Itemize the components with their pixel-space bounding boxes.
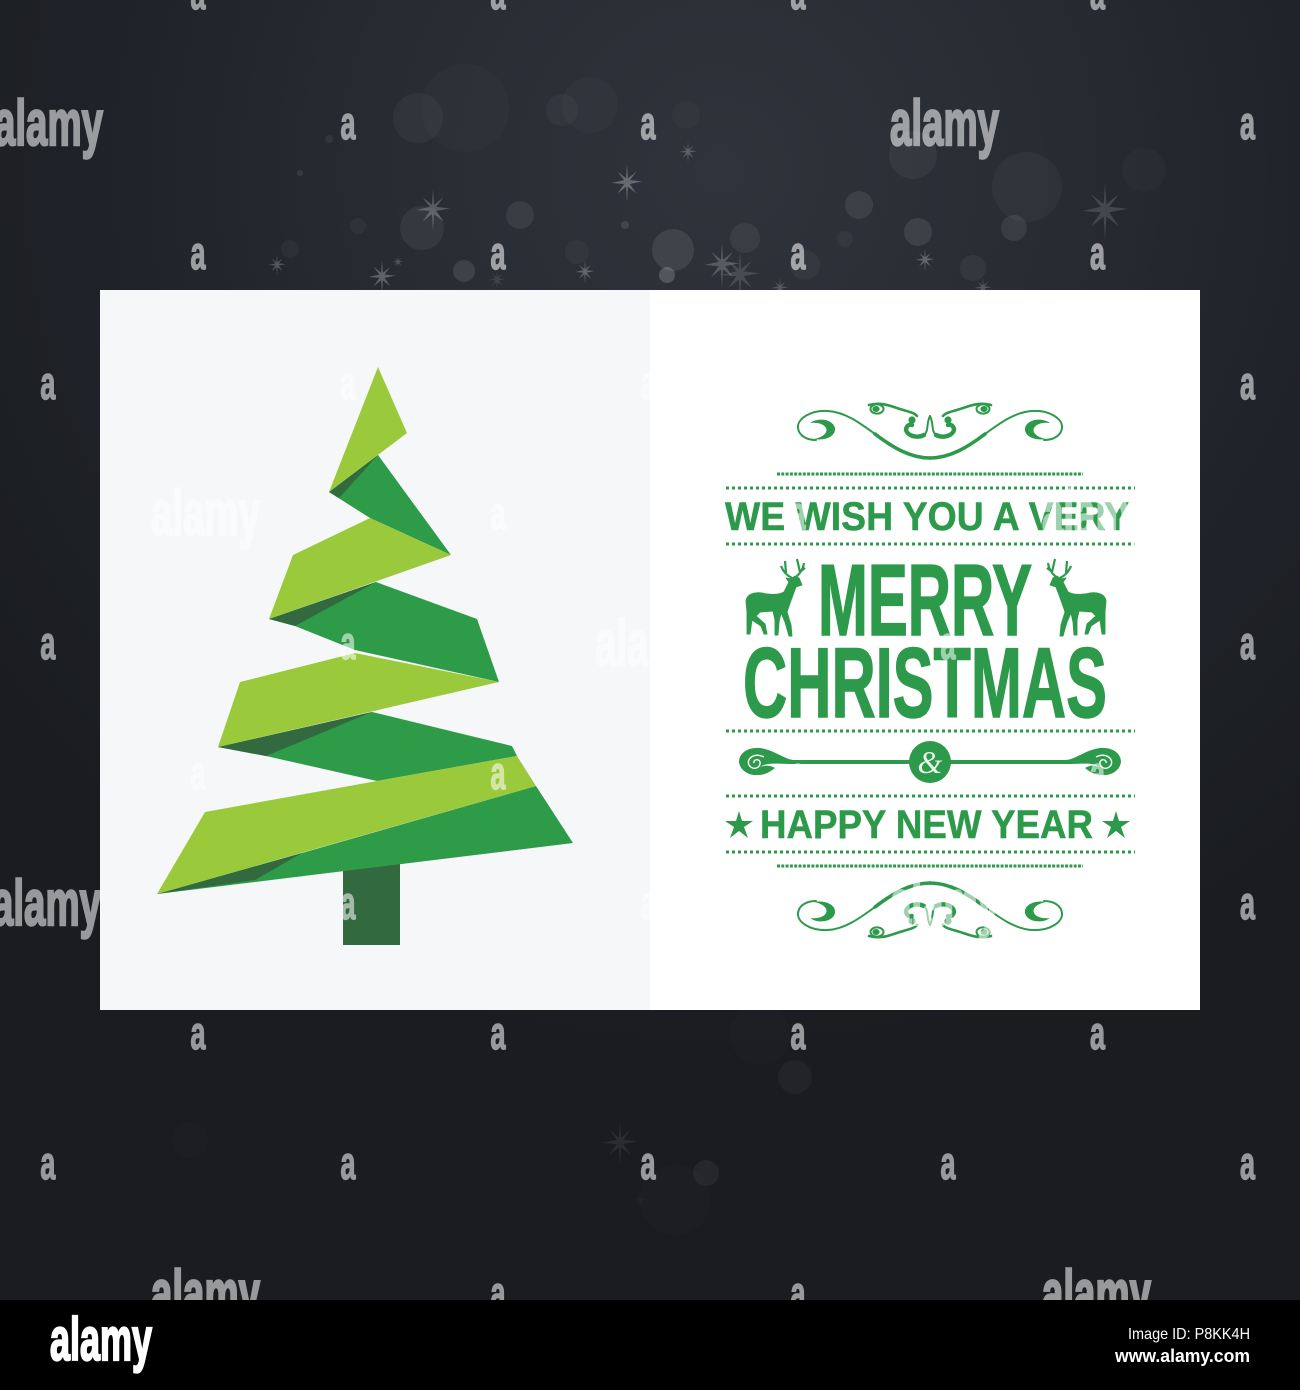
card right panel — [650, 290, 1200, 1010]
icon: left star — [725, 811, 753, 838]
icon: right star — [1102, 811, 1130, 838]
ribbon fold bottom dark — [157, 786, 573, 894]
watermark logos: alamy — [151, 477, 260, 549]
footer bar — [0, 1300, 1300, 1390]
origami ribbon Christmas tree — [157, 367, 573, 945]
ribbon shadow 3 — [218, 712, 372, 756]
ribbon fold 2 dark — [269, 582, 499, 682]
heading: we wish you a very: WE WISH YOU A VERY — [725, 495, 1129, 539]
watermark letter rows: aaaaa — [40, 1138, 1256, 1189]
short dotted rule top — [777, 472, 1083, 476]
tree trunk — [343, 860, 400, 945]
ribbon shadow 2 — [269, 582, 376, 626]
image id: Image ID: P8KK4H — [1128, 1326, 1250, 1343]
watermark letter rows: aaa — [340, 878, 1256, 929]
footer logo: alamy — [50, 1306, 152, 1373]
ornament divider with ampersand — [739, 741, 1121, 783]
top flourish — [798, 404, 1062, 458]
watermark letter rows: aa — [490, 1268, 806, 1319]
short dotted rule bottom — [777, 864, 1083, 868]
watermark letter rows: aaaa — [190, 228, 1106, 279]
website: www.alamy.com — [1114, 1346, 1250, 1366]
watermark letter rows: aaa — [340, 98, 1256, 149]
heading: happy new year: HAPPY NEW YEAR — [760, 803, 1093, 847]
icon: right deer — [1047, 559, 1106, 636]
card — [100, 290, 1200, 1010]
sparkle stars — [268, 141, 1127, 1209]
dotted rule 4 — [726, 794, 1135, 798]
watermark logos: alamy — [595, 607, 704, 679]
watermark logos: alamy — [890, 87, 999, 159]
watermark letter rows: aaaa — [40, 618, 1256, 669]
ribbon middle light — [218, 653, 499, 747]
dotted rule 2 — [726, 542, 1135, 546]
watermark letter rows: aaaa — [190, 1008, 1106, 1059]
greeting typography — [725, 404, 1135, 937]
ribbon shadow bottom — [157, 853, 302, 894]
ribbon fold 3 dark — [218, 712, 517, 781]
ribbon fold 1 dark — [329, 455, 451, 555]
watermark logos: alamy — [890, 867, 999, 939]
watermark letter rows: aaaaa — [40, 358, 1256, 409]
heading: merry: MERRY — [818, 545, 1032, 657]
dotted rule 3 — [726, 730, 1135, 732]
dotted rule 1 — [726, 486, 1135, 490]
watermark letter rows: aaaa — [190, 748, 1106, 799]
card left panel — [100, 290, 650, 1010]
watermark logos: alamy — [151, 1257, 260, 1329]
ribbon upper light — [269, 518, 451, 619]
bottom flourish — [798, 883, 1062, 937]
icon: left deer — [746, 559, 805, 636]
ornament divider with ampersand: & — [918, 744, 943, 780]
dotted rule 5 — [726, 850, 1135, 854]
ribbon top light — [329, 367, 407, 492]
watermark logos: alamy — [1042, 1257, 1151, 1329]
watermark logos: alamy — [1042, 477, 1151, 549]
ribbon bottom light — [157, 756, 536, 894]
watermark letter rows: aa — [490, 488, 806, 539]
ribbon shadow 1 — [329, 455, 378, 498]
watermark logos — [0, 87, 1151, 1329]
bokeh lights — [172, 64, 1166, 1235]
